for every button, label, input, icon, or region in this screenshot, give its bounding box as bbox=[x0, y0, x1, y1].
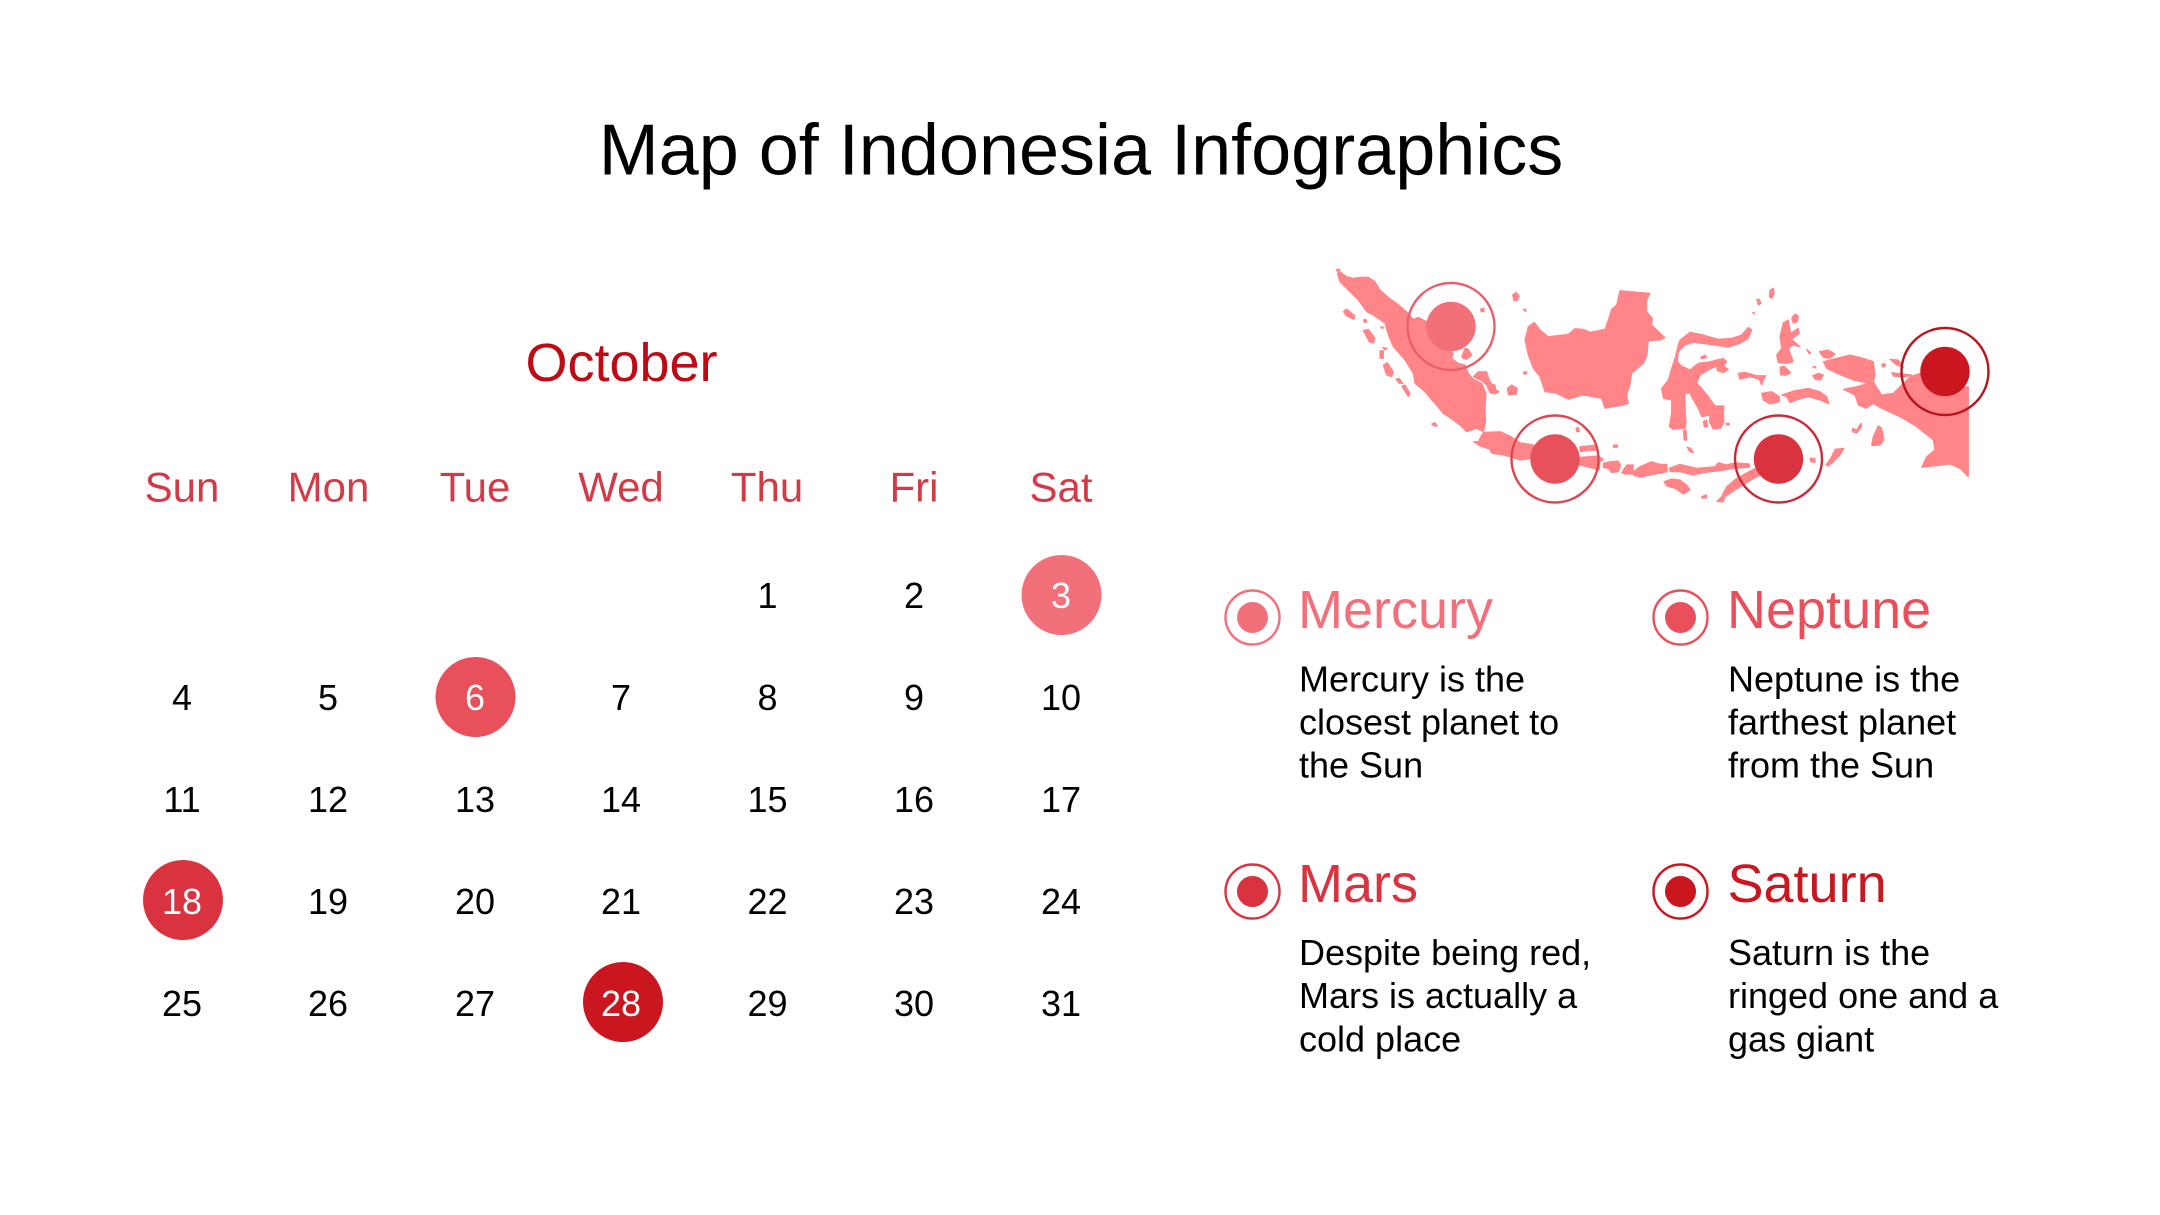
text: Mars description: Mars is actually a bbox=[1299, 975, 1578, 1016]
calendar dates: 24 bbox=[1041, 881, 1081, 922]
calendar dates: 20 bbox=[455, 881, 495, 922]
title: Map of Indonesia Infographics bbox=[599, 110, 1563, 190]
calendar dates: 4 bbox=[172, 677, 192, 718]
panel: Mercury bbox=[1226, 580, 1559, 786]
map of Indonesia bbox=[1337, 269, 1988, 502]
calendar dates: 15 bbox=[747, 779, 788, 820]
calendar dates: 2 bbox=[904, 575, 924, 616]
text: Mercury description: the Sun bbox=[1299, 744, 1423, 786]
highlight: October 18 bbox=[143, 860, 223, 940]
calendar dates: 21 bbox=[601, 881, 641, 922]
map marker: Mars bbox=[1735, 416, 1822, 502]
highlight: October 6 bbox=[436, 657, 516, 737]
calendar dates bbox=[162, 575, 1081, 1024]
calendar dates: 31 bbox=[1041, 983, 1081, 1024]
calendar dates: 14 bbox=[601, 779, 641, 820]
calendar dates: 18 bbox=[162, 881, 202, 922]
highlight: October 28 bbox=[583, 962, 663, 1042]
weekday headers: Fri bbox=[890, 464, 938, 510]
icon: Saturn marker bbox=[1654, 864, 1708, 918]
weekday headers: Tue bbox=[440, 464, 510, 510]
month heading: October bbox=[525, 333, 718, 393]
calendar dates: 30 bbox=[894, 983, 934, 1024]
heading: Mars: Mars bbox=[1298, 854, 1418, 914]
calendar dates: 13 bbox=[455, 779, 495, 820]
weekday headers: Sat bbox=[1029, 464, 1093, 510]
text: Neptune description: from the Sun bbox=[1728, 744, 1934, 786]
map marker: Neptune bbox=[1512, 416, 1598, 502]
icon: Neptune marker bbox=[1654, 590, 1708, 644]
calendar dates: 3 bbox=[1051, 575, 1071, 616]
calendar dates: 28 bbox=[601, 983, 641, 1024]
text: Saturn description: ringed one and a bbox=[1728, 975, 1999, 1016]
panel: calendar bbox=[143, 333, 1102, 1042]
calendar dates: 10 bbox=[1041, 677, 1081, 718]
calendar dates: 5 bbox=[318, 677, 338, 718]
map marker: Mercury bbox=[1408, 283, 1494, 370]
calendar dates: 22 bbox=[747, 881, 788, 922]
heading: Neptune: Neptune bbox=[1727, 580, 1931, 640]
heading: Saturn: Saturn bbox=[1728, 854, 1887, 914]
text: Neptune description: farthest planet bbox=[1728, 702, 1956, 742]
weekday headers bbox=[145, 464, 1093, 510]
calendar dates: 27 bbox=[455, 983, 495, 1024]
highlight: October 3 bbox=[1022, 555, 1102, 635]
text: Mars description: cold place bbox=[1299, 1018, 1461, 1060]
weekday headers: Thu bbox=[731, 464, 803, 510]
calendar dates: 29 bbox=[747, 983, 788, 1024]
calendar dates: 6 bbox=[465, 677, 485, 718]
weekday headers: Sun bbox=[145, 464, 219, 510]
text: Mercury description: Mercury is the bbox=[1299, 658, 1525, 700]
calendar dates: 11 bbox=[163, 779, 201, 820]
text: Saturn description: gas giant bbox=[1728, 1018, 1874, 1060]
icon: Mars marker bbox=[1226, 864, 1280, 918]
calendar dates: 17 bbox=[1041, 779, 1081, 820]
panel: Saturn bbox=[1654, 854, 1999, 1060]
text: Saturn description: Saturn is the bbox=[1728, 932, 1930, 973]
calendar dates: 25 bbox=[162, 983, 202, 1024]
calendar dates: 9 bbox=[904, 677, 924, 718]
weekday headers: Mon bbox=[288, 464, 369, 510]
weekday headers: Wed bbox=[578, 464, 664, 510]
calendar dates: 7 bbox=[611, 677, 631, 718]
calendar dates: 19 bbox=[308, 881, 348, 922]
heading: Mercury: Mercury bbox=[1298, 580, 1493, 640]
map marker: Saturn bbox=[1902, 328, 1988, 415]
calendar dates: 23 bbox=[894, 881, 934, 922]
calendar dates: 8 bbox=[757, 677, 778, 718]
text: Mercury description: closest planet to bbox=[1299, 702, 1559, 742]
calendar dates: 12 bbox=[308, 779, 348, 820]
icon: Mercury marker bbox=[1226, 590, 1280, 644]
panel: Neptune bbox=[1654, 580, 1960, 786]
islands bbox=[1337, 269, 1968, 502]
calendar dates: 1 bbox=[757, 575, 778, 616]
text: Neptune description: Neptune is the bbox=[1728, 658, 1960, 700]
text: Mars description: Despite being red, bbox=[1299, 932, 1591, 973]
panel: Mars bbox=[1226, 854, 1591, 1060]
calendar dates: 26 bbox=[308, 983, 348, 1024]
calendar dates: 16 bbox=[894, 779, 934, 820]
